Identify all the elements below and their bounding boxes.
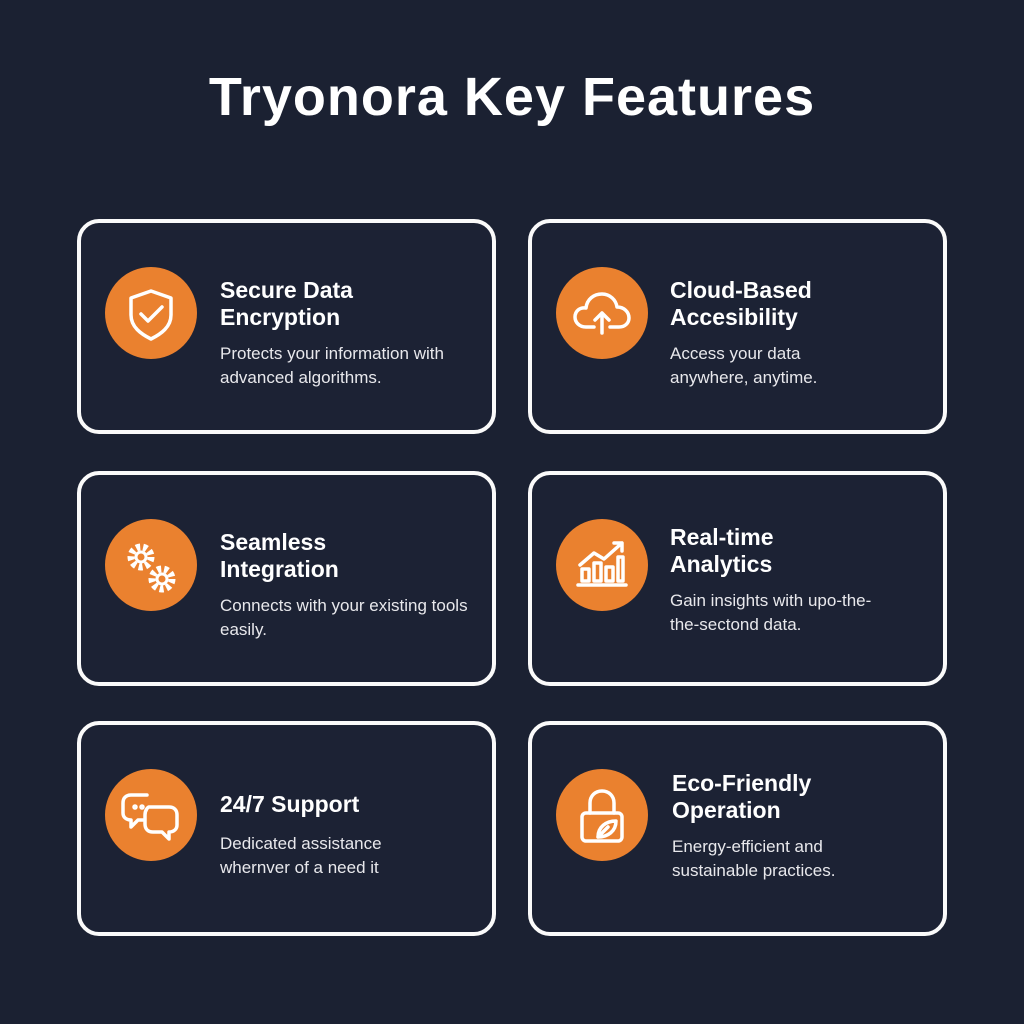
icon: cloud: [556, 267, 648, 359]
text: Access your data: [670, 344, 800, 363]
text: easily.: [220, 620, 267, 639]
title: Tryonora Key Features: [209, 67, 815, 127]
panel: integration: [77, 471, 496, 686]
text: [220, 834, 382, 877]
heading: [220, 529, 339, 582]
heading: Encryption: [220, 304, 340, 330]
text: [220, 596, 468, 639]
heading: Operation: [672, 797, 781, 823]
text: the-sectond data.: [670, 615, 801, 634]
heading: [670, 277, 812, 330]
heading: Cloud-Based: [670, 277, 812, 303]
text: [670, 591, 871, 634]
heading: 24/7 Support: [220, 791, 359, 817]
panel: support: [77, 721, 496, 936]
heading: Secure Data: [220, 277, 353, 303]
text: Energy-efficient and: [672, 837, 823, 856]
text: advanced algorithms.: [220, 368, 382, 387]
heading: [672, 770, 812, 823]
icon: shield: [105, 267, 197, 359]
text: anywhere, anytime.: [670, 368, 817, 387]
panel: analytics: [528, 471, 947, 686]
icon: chart: [556, 519, 648, 611]
heading: Real-time: [670, 524, 774, 550]
panel: secure data encryption: [77, 219, 496, 434]
text: Connects with your existing tools: [220, 596, 468, 615]
text: [672, 837, 835, 880]
heading: [670, 524, 774, 577]
panel: cloud: [528, 219, 947, 434]
text: [220, 344, 444, 387]
heading: Integration: [220, 556, 339, 582]
panel: eco: [528, 721, 947, 936]
icon: chat: [105, 769, 197, 861]
text: Gain insights with upo-the-: [670, 591, 871, 610]
heading: Analytics: [670, 551, 772, 577]
text: sustainable practices.: [672, 861, 835, 880]
heading: Accesibility: [670, 304, 798, 330]
text: whernver of a need it: [220, 858, 379, 877]
text: Dedicated assistance: [220, 834, 382, 853]
text: [670, 344, 817, 387]
heading: [220, 277, 354, 330]
icon: gears: [105, 519, 197, 611]
text: Protects your information with: [220, 344, 444, 363]
icon: lock leaf: [556, 769, 648, 861]
heading: Eco-Friendly: [672, 770, 811, 796]
heading: Seamless: [220, 529, 326, 555]
